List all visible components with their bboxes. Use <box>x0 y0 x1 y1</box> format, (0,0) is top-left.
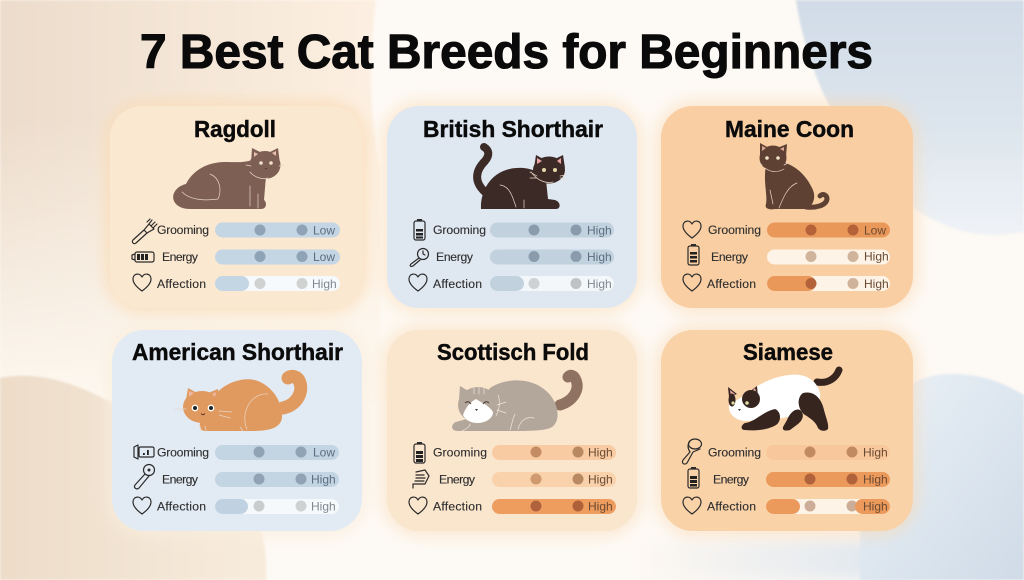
panel: Scottisch Fold <box>381 324 643 537</box>
bar: Affection: High <box>587 277 612 291</box>
heading: Siamese: Siamese <box>743 339 833 365</box>
bar: Affection <box>215 276 340 291</box>
icon: battery <box>414 442 425 463</box>
bar: Energy <box>490 250 614 264</box>
bar: Energy: High <box>864 250 889 264</box>
bar: Grooming <box>767 222 890 238</box>
bar: Energy <box>215 472 339 487</box>
label: Affection: Affection <box>433 500 482 514</box>
illustration: Siamese cat <box>728 370 839 431</box>
panel: British Shorthair <box>381 100 643 314</box>
icon: brush <box>132 219 157 244</box>
label: Grooming: Grooming <box>708 223 761 237</box>
icon: magnifier <box>410 248 428 266</box>
bar: Energy <box>215 250 340 264</box>
bar: Energy <box>766 472 890 487</box>
label: Affection: Affection <box>157 500 206 514</box>
bar: Grooming: Low <box>864 224 886 238</box>
label: Grooming: Grooming <box>157 446 209 460</box>
illustration: Scottish Fold cat <box>448 375 577 431</box>
panel: American Shorthair <box>106 324 368 537</box>
bar: Grooming: High <box>587 224 612 238</box>
bar: Grooming <box>215 222 340 238</box>
label: Energy: Energy <box>436 250 474 264</box>
bar: Affection <box>215 499 339 514</box>
label: Energy: Energy <box>439 472 476 486</box>
bar: Grooming <box>766 445 890 460</box>
label: Affection: Affection <box>157 277 206 291</box>
heading: Maine Coon: Maine Coon <box>725 116 854 142</box>
bar: Grooming <box>215 445 339 460</box>
icon: heart <box>133 497 151 514</box>
bar: Grooming: Low <box>313 224 335 238</box>
icon: heart <box>683 221 701 238</box>
label: Affection: Affection <box>433 277 482 291</box>
icon: hand mirror <box>682 439 702 464</box>
icon: heart <box>133 274 151 291</box>
bar: Grooming: High <box>863 446 888 460</box>
panel: Ragdoll <box>104 100 368 314</box>
bar: Grooming: Low <box>313 446 335 460</box>
bar: Energy: Low <box>313 250 335 264</box>
icon: heart <box>683 274 701 291</box>
label: Grooming: Grooming <box>157 223 209 237</box>
icon: battery <box>688 244 699 265</box>
icon: heart <box>409 497 427 514</box>
icon: heart <box>683 497 701 514</box>
illustration: Maine Coon cat <box>758 143 827 209</box>
bar: Grooming <box>490 222 614 238</box>
label: Energy: Energy <box>162 472 199 486</box>
bar: Affection: High <box>588 500 613 514</box>
label: Energy: Energy <box>713 472 750 486</box>
panel: Siamese <box>655 324 919 537</box>
bar: Energy: High <box>863 472 888 486</box>
illustration: British Shorthair cat <box>477 147 566 209</box>
icon: battery <box>132 252 154 262</box>
label: Energy: Energy <box>162 250 199 264</box>
heading: American Shorthair: American Shorthair <box>132 339 343 365</box>
illustration: American Shorthair cat <box>175 376 301 431</box>
heading: British Shorthair: British Shorthair <box>423 116 603 142</box>
icon: heart <box>409 274 427 291</box>
bar: Affection <box>492 499 616 514</box>
bar: Energy: High <box>588 472 613 486</box>
bar: Energy <box>767 250 890 264</box>
bar: Grooming: High <box>588 446 613 460</box>
icon: battery <box>688 467 699 488</box>
label: Affection: Affection <box>707 500 756 514</box>
label: Energy: Energy <box>711 250 749 264</box>
bar: Affection: High <box>864 277 889 291</box>
bar: Affection: High <box>863 500 888 514</box>
label: Affection: Affection <box>707 277 756 291</box>
icon: key brush <box>134 464 154 489</box>
heading: Scottisch Fold: Scottisch Fold <box>437 339 589 365</box>
bar: Affection: High <box>312 277 337 291</box>
label: Grooming: Grooming <box>433 223 486 237</box>
icon: battery <box>414 219 425 240</box>
label: Grooming: Grooming <box>708 446 761 460</box>
bar: Affection: High <box>311 500 336 514</box>
label: Grooming: Grooming <box>433 446 487 460</box>
illustration: Ragdoll cat <box>173 148 284 209</box>
icon: notes <box>413 470 429 488</box>
icon: battery outline <box>134 445 154 459</box>
bar: Affection <box>490 276 614 291</box>
panel: Maine Coon <box>655 100 919 314</box>
bar: Grooming <box>492 445 616 460</box>
bar: Affection <box>766 499 890 514</box>
bar: Affection <box>767 276 890 291</box>
title: 7 Best Cat Breeds for Beginners <box>140 26 873 79</box>
bar: Energy: High <box>311 472 336 486</box>
bar: Energy <box>492 472 616 487</box>
heading: Ragdoll: Ragdoll <box>194 116 276 142</box>
bar: Energy: High <box>587 250 612 264</box>
